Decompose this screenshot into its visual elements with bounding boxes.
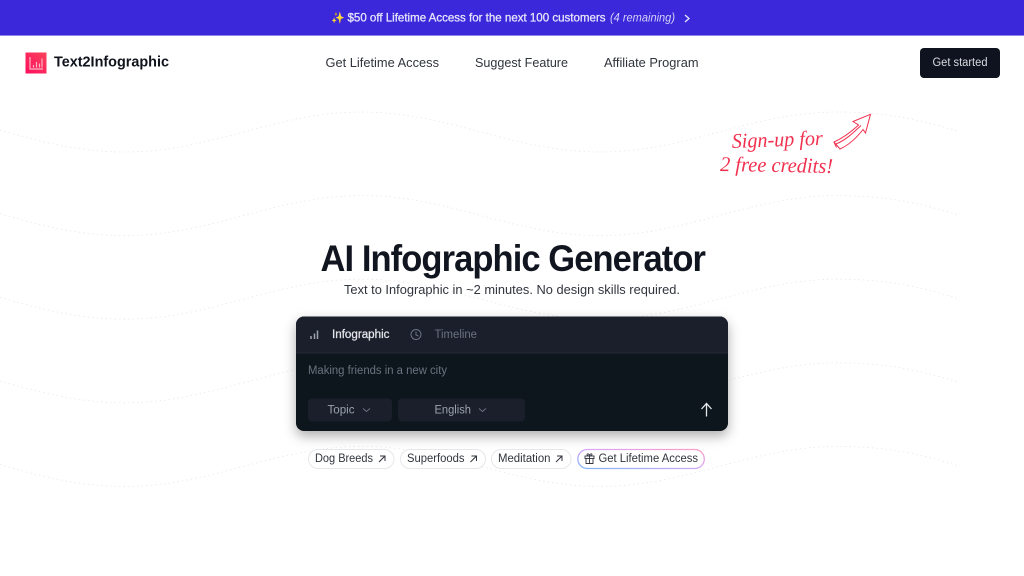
icon: banner chevron (685, 15, 689, 22)
subtitle: Text to Infographic in ~2 minutes. No design skills required. (344, 282, 680, 297)
panel: prompt card (296, 316, 728, 431)
prompt placeholder: Making friends in a new city (308, 365, 447, 377)
navigation links (326, 55, 698, 70)
chip: superfoods: Superfoods (407, 453, 465, 465)
callout text line two: 2 free credits! (720, 152, 833, 178)
suggestion chips (308, 450, 704, 468)
card tab bar (296, 316, 728, 354)
title: AI Infographic Generator (320, 237, 706, 279)
navigation links: Get Lifetime Access (326, 55, 439, 70)
icon: submit arrow (702, 404, 712, 416)
background wave lines (0, 112, 957, 486)
promo banner (0, 0, 1024, 36)
chip: meditation: Meditation (498, 453, 550, 465)
icon: gift (585, 454, 594, 464)
language dropdown: English (434, 404, 471, 416)
banner remaining count: (4 remaining) (610, 10, 675, 24)
chip: dog breeds: Dog Breeds (315, 453, 373, 465)
arrow: pointing to get started (834, 114, 870, 149)
tab: timeline: Timeline (434, 329, 477, 341)
get started button (920, 48, 1000, 78)
callout text line one: Sign-up for (731, 126, 824, 153)
callout: sign-up for 2 free credits (720, 114, 870, 178)
brand name: Text2Infographic (54, 54, 169, 70)
topic dropdown (308, 398, 392, 422)
chip: dog breeds (308, 450, 394, 468)
chip: get lifetime access: Get Lifetime Access (598, 453, 698, 465)
topic dropdown: Topic (328, 404, 355, 416)
icon: logo chart (26, 52, 46, 74)
navigation links: Suggest Feature (475, 55, 568, 70)
chip: get lifetime access (578, 450, 704, 468)
logo (26, 52, 169, 74)
icon: sparkles: ✨ (331, 12, 345, 24)
icon: clock (411, 330, 421, 340)
banner offer text: $50 off Lifetime Access for the next 100 customers (348, 10, 606, 24)
get started button: Get started (932, 57, 988, 69)
icon: bars (311, 330, 318, 339)
navigation links: Affiliate Program (604, 55, 698, 70)
tab: infographic: Infographic (332, 329, 390, 341)
language dropdown (398, 398, 525, 422)
chip: meditation (492, 450, 571, 468)
chip: superfoods (400, 450, 486, 468)
